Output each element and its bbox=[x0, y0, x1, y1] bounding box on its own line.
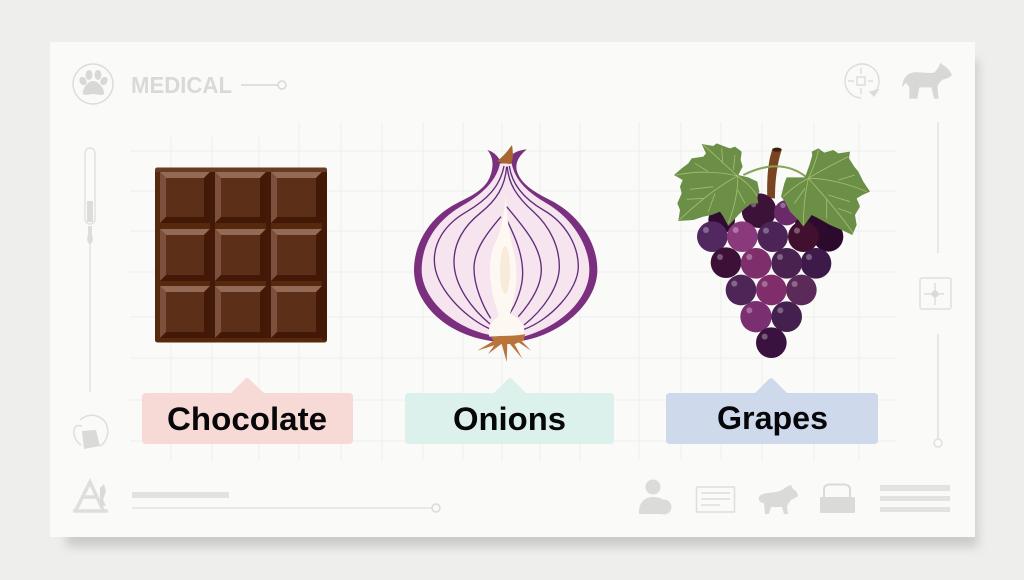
icon: cow bbox=[759, 485, 798, 514]
chocolate squares bbox=[160, 172, 322, 338]
chocolate bar bbox=[155, 168, 327, 342]
icon: document bbox=[696, 487, 734, 512]
icon: test tube gauge bbox=[85, 148, 95, 392]
grapes bbox=[697, 148, 843, 358]
side line bbox=[937, 122, 939, 253]
connector bbox=[241, 81, 286, 89]
text bar and slider bbox=[132, 492, 440, 512]
stem bbox=[767, 148, 782, 198]
left leaf bbox=[674, 143, 759, 226]
paper panel bbox=[50, 42, 975, 537]
icon: triangle tool bbox=[73, 482, 108, 511]
icon: people bbox=[639, 480, 672, 514]
label: grapes: Grapes bbox=[717, 400, 828, 436]
icon: target compass bbox=[845, 64, 879, 98]
icon: lock bbox=[820, 484, 855, 513]
label: onions: Onions bbox=[453, 401, 566, 437]
heading: medical: MEDICAL bbox=[131, 72, 232, 98]
right leaf bbox=[781, 148, 870, 235]
icon: crosshair box bbox=[920, 278, 951, 309]
grape cluster bbox=[697, 193, 843, 358]
label: chocolate: Chocolate bbox=[167, 401, 327, 437]
label: grapes bbox=[666, 378, 878, 444]
slider right bbox=[934, 334, 942, 447]
icon: lines bbox=[880, 485, 950, 512]
icon: horse bbox=[902, 63, 952, 99]
icon: pot bbox=[74, 415, 108, 449]
label: chocolate bbox=[142, 378, 353, 444]
stem top bbox=[772, 148, 782, 152]
label: onions bbox=[405, 378, 614, 444]
icon: paw bbox=[73, 64, 113, 104]
onion bbox=[414, 145, 597, 362]
